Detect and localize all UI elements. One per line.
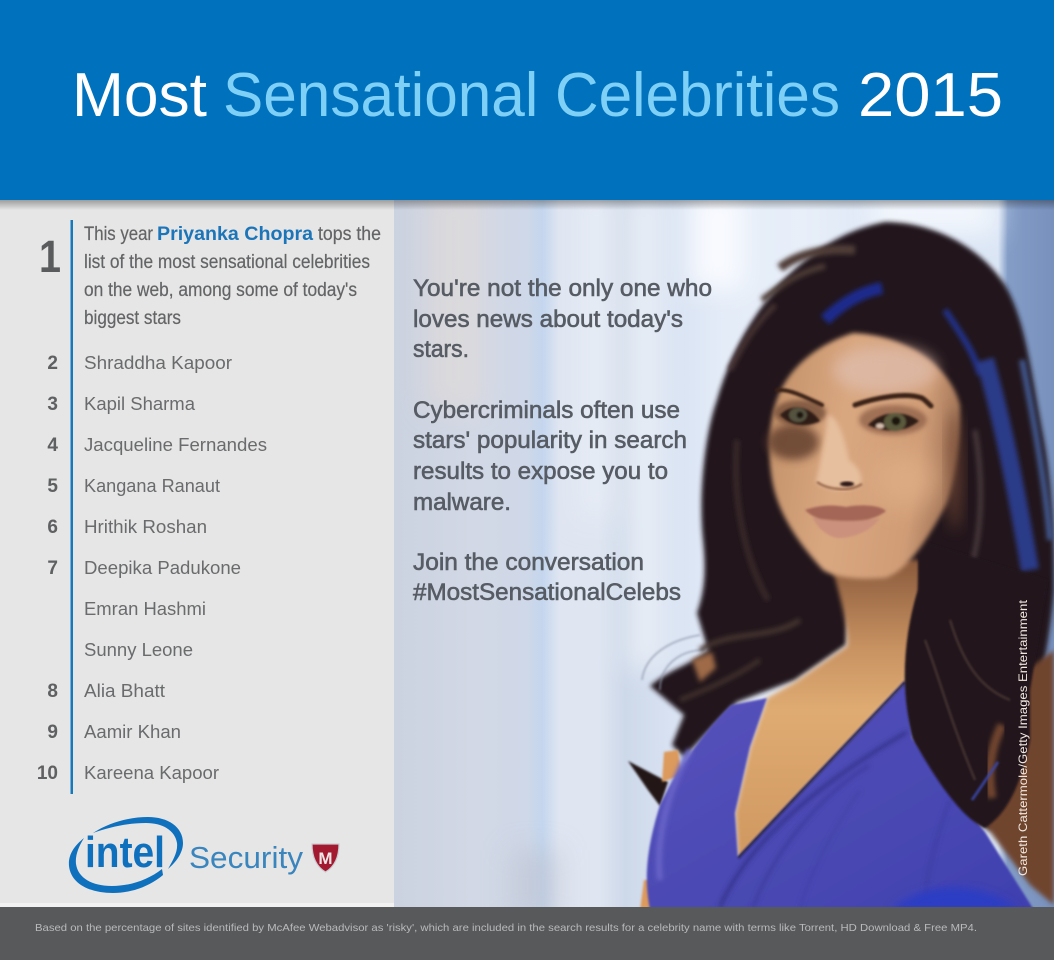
hair tail: [628, 761, 668, 806]
right shoulder: [985, 650, 1054, 905]
lips: [805, 505, 886, 538]
celebrity names: Shraddha Kapoor: [84, 353, 232, 373]
curl over chest and shoulder: [905, 540, 1048, 828]
rank 1 description: Priyanka Chopra: [157, 224, 313, 245]
rank 1 description: tops the: [318, 224, 381, 245]
rank numbers: [37, 353, 58, 784]
hair highlights: [680, 250, 1050, 720]
nose: [816, 415, 862, 489]
celebrity names: [84, 353, 267, 783]
center copy text: malware.: [413, 489, 511, 516]
intel wordmark: intel: [85, 828, 165, 877]
celebrity names: Aamir Khan: [84, 722, 181, 742]
panel: ranking sidebar background: [0, 200, 394, 903]
right cheek highlight: [884, 457, 948, 508]
rank 1 description: [84, 224, 381, 329]
background curtain highlights: [425, 190, 995, 920]
rank numbers: 2: [47, 353, 58, 374]
vertical list divider: [70, 220, 73, 794]
rank 1 description: biggest stars: [84, 308, 181, 329]
title: 2015: [858, 61, 1003, 130]
face: [767, 333, 963, 579]
rank numbers: 5: [47, 476, 58, 497]
center copy text: You're not the only one who: [413, 275, 712, 302]
title: Most: [72, 61, 207, 130]
hair wisps: [642, 635, 705, 690]
photo credit: Gareth Cattermole/Getty Images Entertainment: [1016, 599, 1030, 876]
rank 1 description: This year: [84, 224, 154, 245]
eyebrows: [777, 390, 931, 406]
rank numbers: 3: [47, 394, 58, 415]
hair: [628, 222, 1054, 830]
center copy text: stars.: [413, 336, 469, 363]
footer note: Based on the percentage of sites identified by McAfee Webadvisor as 'risky', which are included in the search results for a celebrity name with terms like Torrent, HD Download & Free MP4.: [35, 922, 977, 934]
celebrity names: Alia Bhatt: [84, 681, 165, 701]
center copy text: [413, 275, 712, 606]
celebrity names: Jacqueline Fernandes: [84, 435, 267, 455]
rank 1 number: 1: [39, 231, 61, 282]
photo panel: Priyanka Chopra portrait: [394, 190, 1054, 920]
intel swoosh upper arc: [93, 817, 183, 869]
celebrity names: Kareena Kapoor: [84, 763, 219, 783]
celebrity names: Hrithik Roshan: [84, 517, 207, 537]
center copy text: #MostSensationalCelebs: [413, 579, 681, 606]
security wordmark: Security: [189, 840, 304, 875]
dress neckline edge: [738, 682, 905, 858]
center copy text: results to expose you to: [413, 458, 668, 485]
McAfee shield: M: [318, 849, 333, 868]
celebrity names: Kangana Ranaut: [84, 476, 220, 496]
blue dress: [647, 682, 1034, 910]
rank 1 description: on the web, among some of today's: [84, 280, 357, 301]
McAfee shield: [312, 844, 339, 872]
center copy text: Cybercriminals often use: [413, 397, 680, 424]
rank numbers: 4: [47, 435, 58, 456]
footer band: [0, 907, 1054, 960]
celebrity names: Emran Hashmi: [84, 599, 206, 619]
rank numbers: 7: [47, 558, 58, 579]
rank numbers: 10: [37, 763, 58, 784]
neck and chest: [735, 560, 925, 860]
celebrity names: Sunny Leone: [84, 640, 193, 660]
title: [72, 61, 1003, 130]
dress folds: [654, 730, 908, 907]
cheek shadow under eye: [767, 424, 819, 460]
rank numbers: 9: [47, 722, 58, 743]
header band: [0, 0, 1054, 200]
eye socket shading: [859, 405, 927, 435]
title: Sensational Celebrities: [223, 61, 840, 130]
intel swoosh lower arc: [69, 838, 163, 893]
center copy text: loves news about today's: [413, 306, 683, 333]
celebrity names: Kapil Sharma: [84, 394, 196, 414]
center copy text: stars' popularity in search: [413, 427, 687, 454]
rank 1 description: list of the most sensational celebrities: [84, 252, 370, 273]
celebrity names: Deepika Padukone: [84, 558, 241, 578]
rank numbers: 8: [47, 681, 58, 702]
logo: Intel Security: [69, 817, 339, 893]
forehead highlight: [833, 346, 937, 394]
rank numbers: 6: [47, 517, 58, 538]
right face edge shadow: [947, 410, 963, 530]
left arm skin: [640, 652, 716, 910]
center copy text: Join the conversation: [413, 549, 644, 576]
eyes: [780, 407, 919, 431]
